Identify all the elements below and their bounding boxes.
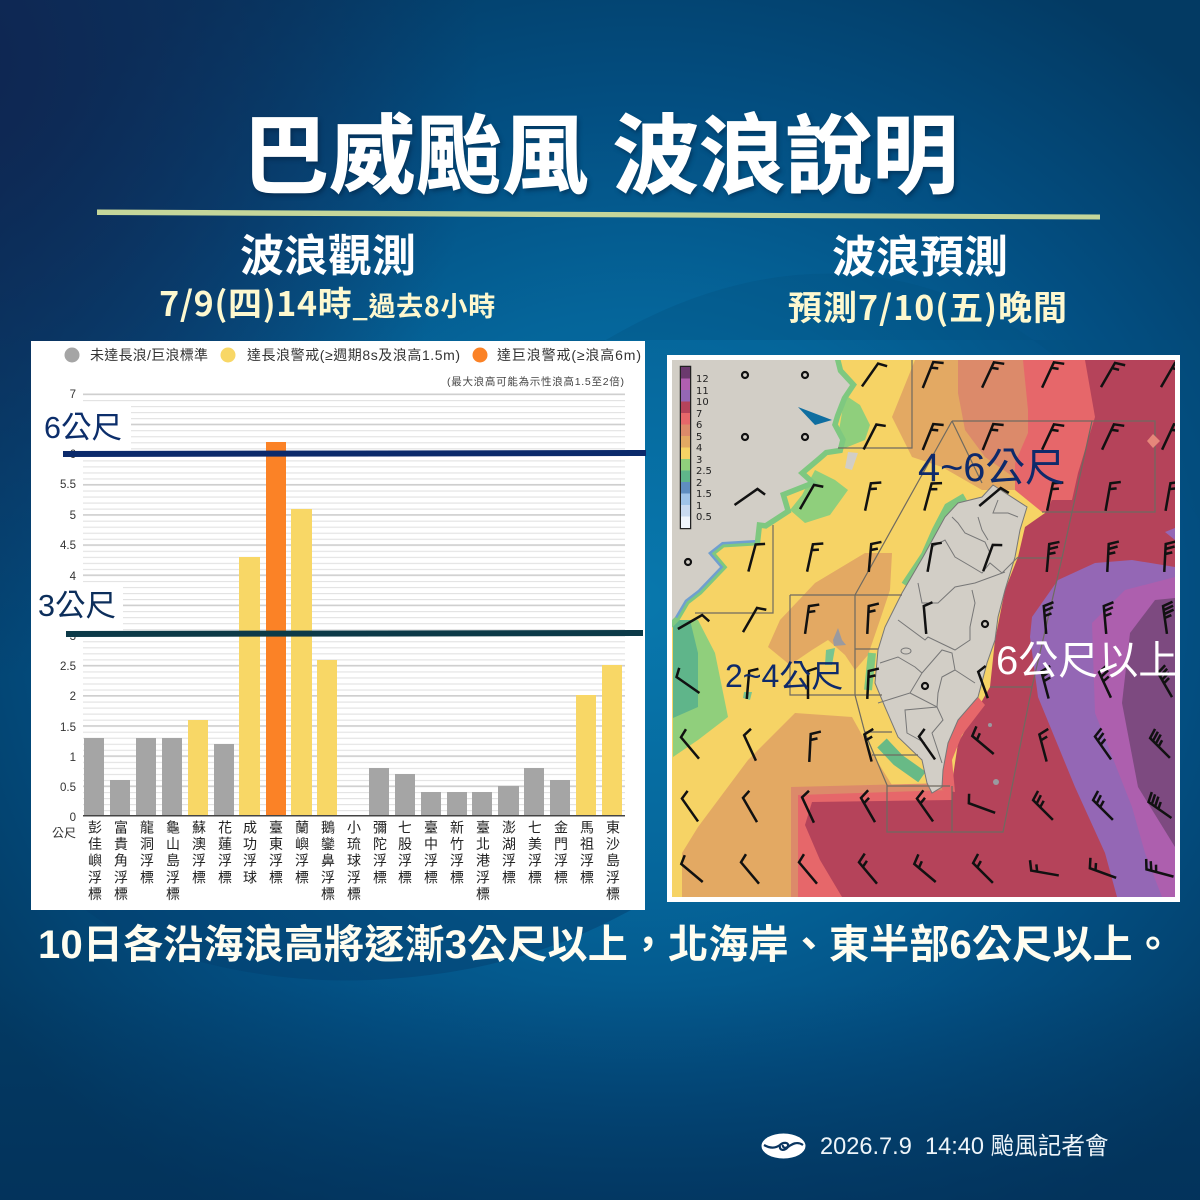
islands <box>833 434 1160 785</box>
legend: 達巨浪警戒(≥浪高6m) <box>497 347 641 363</box>
y axis labels: 0 <box>70 812 76 824</box>
y axis labels: 7 <box>70 389 76 401</box>
panel: forecast wave map <box>667 355 1180 902</box>
station labels <box>87 819 621 904</box>
mainland coast <box>672 360 858 620</box>
map legend: 1 <box>696 501 702 512</box>
map legend <box>680 366 712 528</box>
station labels: 富貴角浮標 <box>113 819 129 904</box>
station labels: 金門浮標 <box>553 820 569 887</box>
map legend: 10 <box>696 397 709 408</box>
y axis labels: 公尺 <box>52 826 76 840</box>
map legend: 12 <box>696 374 709 385</box>
y axis labels: 3 <box>70 631 76 643</box>
y axis labels: 2.5 <box>60 661 76 673</box>
label: 2~4 m: 2~4公尺 <box>725 658 843 694</box>
title: 巴威颱風 波浪說明 <box>242 109 959 205</box>
station labels: 七美浮標 <box>527 820 543 887</box>
y axis labels: 1 <box>70 752 76 764</box>
station labels: 七股浮標 <box>397 820 413 887</box>
map legend: 7 <box>696 409 702 420</box>
station labels: 東沙島浮標 <box>605 820 621 904</box>
station labels: 鵝鑾鼻浮標 <box>320 820 336 904</box>
icon: agency logo <box>762 1134 806 1158</box>
map legend: 2 <box>696 478 702 489</box>
title divider <box>97 210 1100 220</box>
wind barbs <box>674 359 1185 884</box>
6 m label: 6公尺 <box>44 411 122 445</box>
y axis labels: 2 <box>70 691 76 703</box>
label: 6 m or more: 6公尺以上 <box>996 639 1178 683</box>
label: 4~6 m: 4~6公尺 <box>918 446 1065 490</box>
gridlines <box>83 394 625 816</box>
station labels: 花蓮浮標 <box>217 820 233 887</box>
map legend: 4 <box>696 443 702 454</box>
y axis labels: 0.5 <box>60 782 76 794</box>
wave height colour fields <box>672 360 1175 897</box>
panel: bar chart of observed wave height <box>31 341 646 910</box>
y axis labels: 6 <box>70 449 76 461</box>
map legend: 1.5 <box>696 489 712 500</box>
map legend: 2.5 <box>696 466 712 477</box>
station labels: 臺東浮標 <box>268 820 284 887</box>
3 m threshold line <box>66 630 643 637</box>
station labels: 馬祖浮標 <box>579 820 595 887</box>
station labels: 小琉球浮標 <box>346 820 362 904</box>
bars <box>83 442 625 816</box>
station labels: 彌陀浮標 <box>372 820 388 887</box>
y axis labels: 5 <box>70 510 76 522</box>
y axis labels: 4 <box>70 571 77 583</box>
y axis labels <box>52 389 77 840</box>
station labels: 蘭嶼浮標 <box>294 820 310 887</box>
legend: 未達長浪/巨浪標準 <box>90 347 208 363</box>
station labels: 新竹浮標 <box>449 820 465 887</box>
summary text: 10日各沿海浪高將逐漸3公尺以上，北海岸、東半部6公尺以上。 <box>38 923 1173 967</box>
6 m threshold line <box>63 450 646 457</box>
station labels: 龍洞浮標 <box>139 819 155 887</box>
3 m label: 3公尺 <box>38 589 116 623</box>
y axis labels: 1.5 <box>60 722 76 734</box>
y axis labels: 4.5 <box>60 540 76 552</box>
legend <box>64 347 641 363</box>
subheading: forecast time: 預測7/10(五)晚間 <box>788 281 1068 330</box>
y axis labels: 5.5 <box>60 479 76 491</box>
map legend: 3 <box>696 455 702 466</box>
Taiwan island <box>875 485 1027 793</box>
legend: 達長浪警戒(≥週期8s及浪高1.5m) <box>247 347 460 363</box>
map legend: 5 <box>696 432 702 443</box>
map legend: 0.5 <box>696 512 712 523</box>
calm wind markers <box>685 372 988 689</box>
chart note: (最大浪高可能為示性浪高1.5至2倍) <box>447 375 624 388</box>
station labels: 臺中浮標 <box>423 820 439 887</box>
heading: wave observation: 波浪觀測 <box>240 232 416 281</box>
footer date and event: 2026.7.9 14:40 颱風記者會 <box>820 1134 1109 1160</box>
map legend: 11 <box>696 386 709 397</box>
station labels: 彭佳嶼浮標 <box>87 820 103 904</box>
heading: wave forecast: 波浪預測 <box>832 233 1008 282</box>
station labels: 臺北港浮標 <box>475 820 491 904</box>
station labels: 龜山島浮標 <box>165 820 181 904</box>
station labels: 蘇澳浮標 <box>191 820 207 887</box>
subheading: observation time: 7/9(四)14時_過去8小時 <box>159 277 496 326</box>
station labels: 成功浮球 <box>242 820 258 887</box>
station labels: 澎湖浮標 <box>501 820 517 887</box>
map legend: 6 <box>696 420 702 431</box>
forecast region outlines <box>695 359 1155 832</box>
